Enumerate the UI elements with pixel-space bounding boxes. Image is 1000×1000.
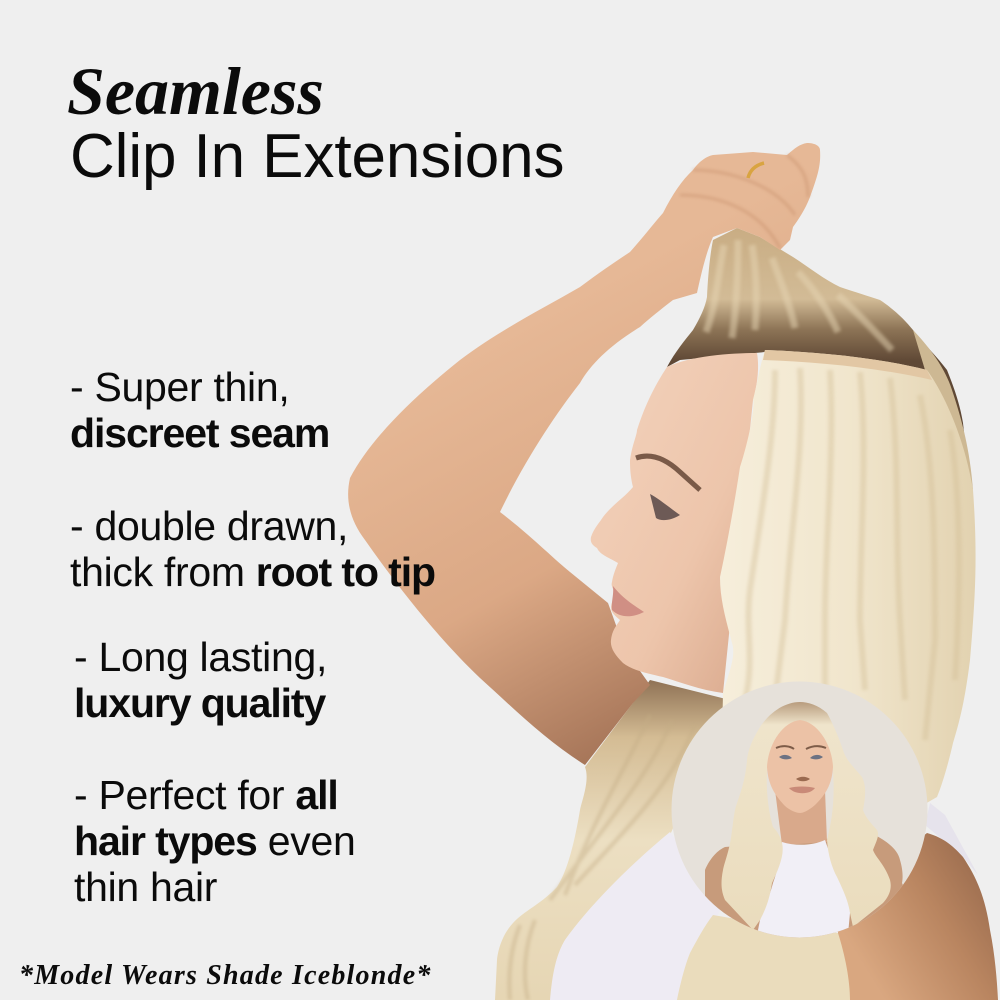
inset lips <box>789 786 815 793</box>
ponytail with dark roots <box>667 228 973 490</box>
white top <box>550 832 725 1000</box>
ring <box>748 163 764 178</box>
inset arms <box>705 836 903 938</box>
weft seam <box>763 350 932 380</box>
arm and hand <box>348 143 820 765</box>
eye <box>650 494 680 520</box>
inset eyes <box>779 755 823 759</box>
outer rim of lighter hair <box>913 330 973 490</box>
bullet: hair types <box>74 772 356 910</box>
title main line: Clip In Extensions <box>70 122 564 191</box>
inset nose shadow <box>796 777 810 781</box>
finger creases <box>680 155 808 248</box>
inset hair <box>722 702 891 930</box>
bullet: root to tip: thick from root to tip <box>70 549 435 595</box>
shoulder <box>838 833 998 1000</box>
top strap right <box>925 803 978 875</box>
long straight clip-in hair <box>720 350 976 830</box>
bullet: discreet seam: discreet seam <box>70 410 329 456</box>
lower centre hair <box>677 915 850 1000</box>
eyebrow <box>636 456 700 490</box>
bullet: discreet seam: - Super thin, <box>70 364 289 410</box>
bullet: hair types: hair types even <box>74 818 356 864</box>
inset brows <box>776 746 826 749</box>
lips <box>612 586 644 616</box>
inset circle portrait <box>672 682 928 945</box>
face profile <box>591 353 758 693</box>
title <box>67 53 564 191</box>
footnote: *Model Wears Shade Iceblonde* <box>19 960 432 991</box>
bullet: root to tip <box>70 503 435 595</box>
bullet: luxury quality: luxury quality <box>74 680 325 726</box>
bullet: luxury quality: - Long lasting, <box>74 634 327 680</box>
model photo illustration <box>348 143 998 1000</box>
inset neck <box>775 790 827 845</box>
bullet: hair types: - Perfect for all <box>74 772 338 818</box>
bullet: luxury quality <box>74 634 327 726</box>
lower wavy hair <box>495 680 730 1000</box>
bullet: root to tip: - double drawn, <box>70 503 348 549</box>
bullet: hair types: thin hair <box>74 864 217 910</box>
bullet: discreet seam <box>70 364 329 456</box>
inset white top <box>755 840 850 945</box>
title script line: Seamless <box>67 53 324 129</box>
inset face <box>767 720 833 813</box>
